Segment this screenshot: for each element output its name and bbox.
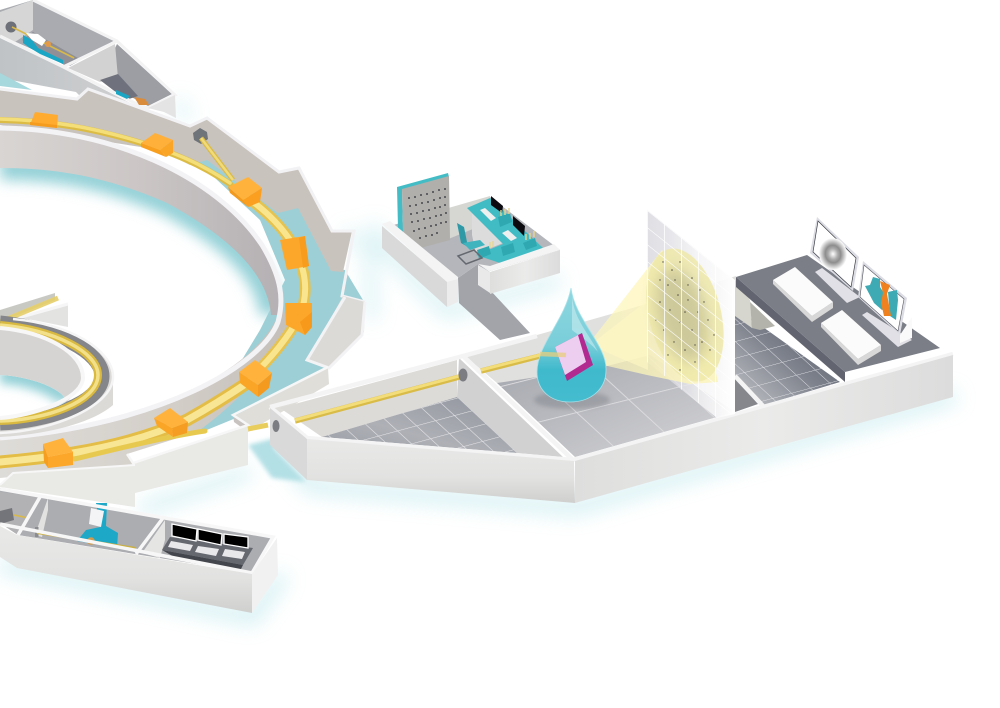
long front face [307, 439, 575, 503]
divider face [457, 358, 563, 457]
beam far segment shadow [0, 120, 230, 184]
crystal face [555, 335, 586, 375]
lab preparation room [382, 173, 560, 340]
storage ring white top edge [0, 128, 281, 438]
left room back and side walls [0, 0, 115, 66]
monitor 3 [224, 534, 248, 548]
rack 3 tubes [490, 241, 493, 248]
second room left wall [35, 498, 48, 537]
small inner ring and booster [0, 293, 113, 437]
rack 1 [498, 213, 512, 227]
main room tile floor [497, 355, 735, 457]
shadow under droplet [534, 391, 610, 409]
teal strip near upper left room [0, 73, 32, 90]
rack 2 [523, 238, 537, 250]
side beamline from port [201, 138, 233, 180]
lighter cone rays [590, 300, 648, 370]
chair back [457, 223, 468, 247]
beam near segment shadow [0, 381, 250, 462]
lower tunnel outer wall sections [0, 296, 365, 507]
beam port and beam [248, 355, 540, 432]
monitor 2 [513, 216, 525, 236]
booster inner white edge [0, 328, 83, 418]
far wall inner face [0, 90, 352, 272]
right room back wall [100, 44, 172, 106]
booster back wall [0, 293, 55, 322]
left room beam [12, 27, 74, 58]
wall tops of hall [270, 336, 953, 460]
monitor 1 [172, 524, 197, 541]
ring interior teal glow [0, 168, 272, 315]
wedge room back wall [280, 360, 457, 437]
board back [397, 173, 449, 233]
teal floor of the storage ring tunnel [185, 150, 366, 434]
magnet 7 [154, 408, 188, 437]
second room instrument [77, 503, 118, 548]
magnet 5 [285, 303, 312, 335]
beam right segment [245, 196, 305, 378]
beam sample [87, 537, 95, 545]
left room sample [45, 41, 51, 47]
diffraction speckles [655, 261, 715, 371]
wedge room tile lines [322, 397, 517, 453]
rack 3 [477, 246, 491, 259]
lab left wall face [382, 226, 447, 307]
keyboard 1 [773, 267, 833, 316]
storage ring wall far side [0, 127, 283, 315]
diffraction dark center [647, 263, 717, 367]
booster channel [0, 323, 102, 423]
magnet 2 [141, 133, 173, 157]
rack 2 tubes [526, 231, 534, 240]
upper booster beam [0, 298, 58, 322]
lab left wall top [382, 221, 458, 283]
main experiment hall [248, 276, 953, 503]
beam near segment [0, 381, 250, 462]
diagonal wall face [234, 368, 329, 432]
wedge room beam highlight [295, 375, 463, 420]
bottom left experiment room [0, 488, 278, 613]
beam entering wedge room [248, 425, 268, 429]
lab wall end cap [447, 279, 458, 307]
keyboard 1 side [773, 280, 833, 322]
right upper wall segment [308, 296, 365, 368]
monitor 2 frame [858, 261, 907, 335]
lower middle wall edge [127, 367, 328, 463]
booster beam highlight [0, 325, 98, 421]
end of right room wall [148, 95, 176, 118]
upper left white wall tops [0, 0, 175, 108]
keyboard 1 [480, 208, 496, 221]
first room light wall [0, 492, 40, 535]
beam right segment shadow [245, 196, 305, 378]
drop highlight [572, 296, 598, 352]
lower middle wall [133, 425, 248, 493]
monitor 2 stand [862, 312, 912, 347]
left angled face [270, 408, 307, 480]
right room tile floor [735, 315, 840, 405]
light cone [590, 250, 718, 384]
magnet 6 [239, 360, 272, 397]
booster beam [0, 325, 98, 421]
lower left wall [0, 465, 135, 507]
soft teal glow under the building [0, 100, 955, 618]
keyboard 2 [821, 310, 881, 359]
magnet 3 [228, 177, 262, 207]
booster hole [0, 375, 66, 417]
keyboard 2 side [821, 323, 881, 365]
wall under desk [735, 280, 752, 328]
analysis desk [735, 217, 940, 382]
third room left wall [142, 520, 165, 558]
entry port [272, 420, 280, 432]
outer front face [0, 38, 136, 106]
room interior walls [0, 488, 273, 573]
far wall white top edge [0, 89, 365, 302]
teal floor below the beam room [248, 438, 306, 482]
wedge room tile floor [322, 397, 517, 453]
desk top [467, 198, 543, 264]
chair [457, 223, 485, 264]
monitor 2 support [900, 317, 912, 343]
upper left experiment rooms [0, 0, 176, 118]
back wall of main room [465, 276, 736, 383]
top edges of room [0, 489, 273, 573]
storage ring wall near side [0, 300, 288, 478]
panel sheet [647, 210, 735, 418]
monitor 1 screen [813, 221, 856, 287]
protein orange domain [880, 281, 891, 316]
orange magnets [30, 112, 312, 468]
monitor 2 screen [860, 265, 904, 331]
right room instrument [116, 90, 130, 99]
rack 1 tubes [501, 208, 509, 216]
gray wall stub beneath divider [735, 378, 758, 412]
wedge room beam [295, 376, 463, 421]
crystal rim [555, 333, 593, 381]
left room instrument [23, 35, 63, 64]
booster hole teal glow [0, 375, 66, 402]
lab floor [390, 197, 560, 278]
control desk [162, 524, 253, 571]
monitor 1 diffraction image [816, 236, 850, 272]
sample droplet with crystal [534, 288, 610, 409]
right room floor [100, 74, 138, 100]
monitor 1 stand [815, 268, 860, 303]
left room side wall [0, 0, 33, 44]
second room beam [37, 533, 136, 548]
drop body [537, 288, 606, 402]
first room beam [14, 515, 28, 518]
monitor 2 [198, 529, 222, 545]
instrument white head [89, 508, 104, 527]
left room floor [22, 32, 78, 66]
beam far segment [0, 119, 230, 183]
lab right wall top [478, 244, 560, 271]
board dots [408, 188, 447, 239]
first room instrument [0, 508, 14, 524]
right end face [252, 538, 278, 613]
chair base [458, 250, 482, 264]
lab right wall end [478, 265, 490, 293]
panel grid lines [647, 210, 735, 418]
magnet 4 [280, 236, 309, 270]
main room beam [481, 356, 540, 371]
main room tile lines [497, 355, 735, 457]
protein structure model [865, 277, 898, 320]
board face [402, 176, 450, 250]
side beamline highlight [201, 138, 233, 180]
main yellow electron beam ring [0, 119, 305, 462]
teal board [397, 173, 450, 250]
wedge top edge [14, 304, 68, 319]
right room tile lines [735, 315, 840, 405]
desk under part [162, 550, 243, 571]
monitor 1 [491, 196, 503, 213]
front wall face [0, 526, 252, 613]
corridor to hall [458, 264, 530, 340]
lower left wall edge [0, 465, 135, 485]
right upper wall white edge [307, 297, 365, 368]
monitor 1 frame [810, 217, 859, 291]
protein teal domains [865, 277, 898, 320]
desk front [736, 277, 845, 382]
booster outer wall face [0, 318, 113, 437]
magnet 1 [30, 112, 58, 128]
second room beam mount [35, 527, 38, 537]
rack 4 [501, 243, 515, 256]
beam inside droplet [540, 354, 566, 355]
tangential beam to experiment [75, 431, 205, 459]
keyboard 2 [502, 230, 517, 241]
lab right wall front [490, 250, 560, 294]
booster inner wall [0, 328, 83, 402]
mid port [458, 368, 468, 382]
diffraction panel and light cone [590, 210, 736, 418]
magnet 8 [43, 438, 73, 468]
right room orange block [134, 97, 149, 105]
desk pedestal [750, 302, 775, 330]
chair seat [463, 240, 485, 250]
desk surface [736, 255, 940, 372]
right room left wall [68, 44, 118, 82]
diagonal wall notch [233, 415, 248, 432]
beam port on far wall [193, 128, 208, 144]
main room beam highlight [481, 355, 540, 370]
wedge wall [15, 305, 68, 327]
beam port [6, 22, 16, 32]
booster white outer edge [0, 319, 113, 433]
keyboards [168, 541, 245, 559]
desk legs [472, 213, 503, 254]
desk top [162, 537, 253, 565]
left room instrument white block [26, 33, 46, 46]
desk [467, 196, 543, 264]
right front face [575, 355, 953, 503]
yellow diffraction ellipse [634, 240, 736, 390]
storage ring outer far wall [0, 89, 365, 302]
lab back wall [438, 196, 490, 240]
